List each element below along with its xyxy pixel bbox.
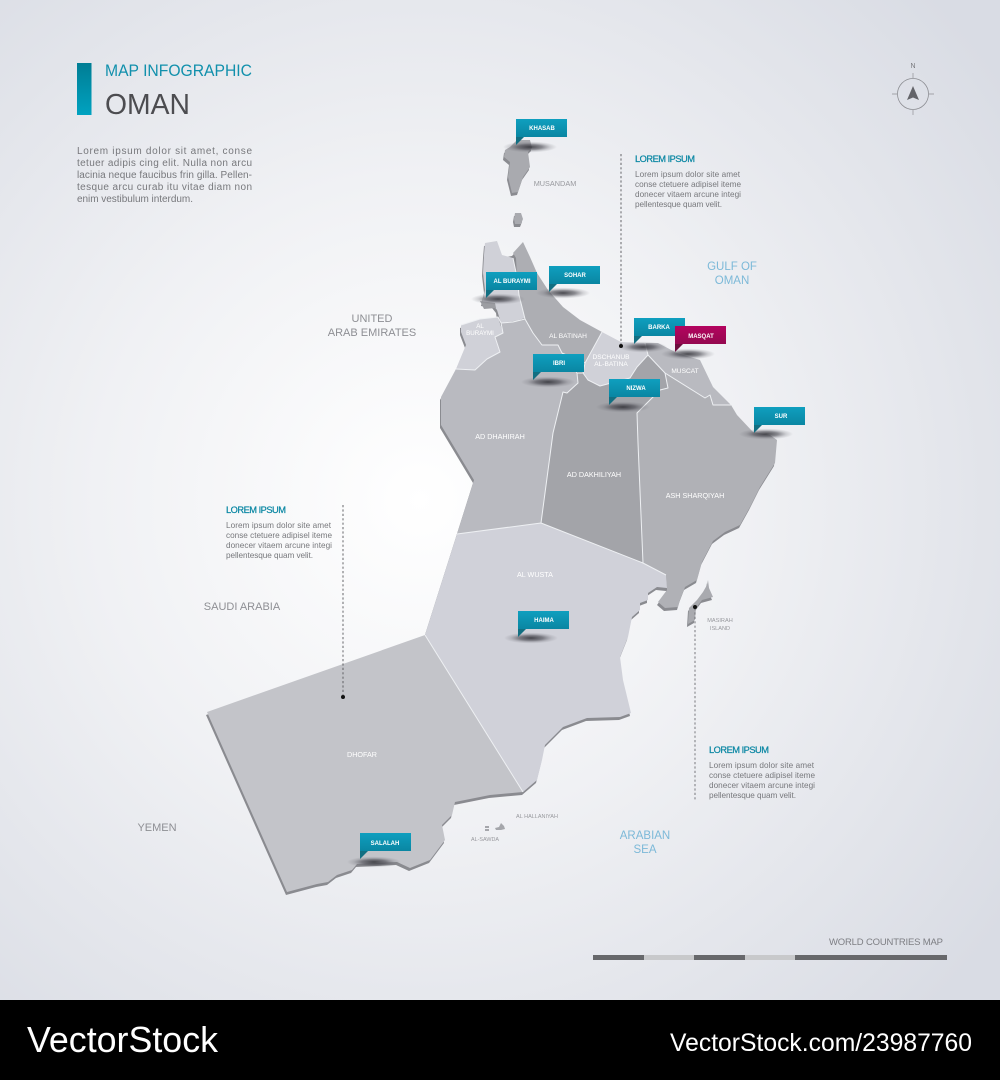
callout: bottom right: donecer vitaem arcune integi — [709, 781, 815, 790]
callout: bottom right: Lorem ipsum dolor site amet — [709, 761, 815, 770]
intro text block: tetuer adipis cing elit. Nulla non arcu — [77, 158, 252, 169]
region: Al Batinah — [513, 242, 602, 363]
region labels: DSCHANUB — [592, 354, 630, 361]
region: Al Buraymi north — [482, 241, 525, 323]
region: Al Hallaniyah islands — [485, 823, 505, 831]
flag: Haima — [504, 611, 569, 644]
callout: top right: donecer vitaem arcune integi — [635, 190, 741, 199]
title block: OMAN — [105, 89, 190, 121]
flag: Sur: SUR — [775, 414, 788, 420]
flag: Sohar — [536, 266, 600, 298]
map of Oman — [206, 140, 777, 895]
icon: compass — [892, 63, 934, 115]
country and sea labels: OMAN — [715, 275, 749, 287]
callout: left: conse ctetuere adipisel iteme — [226, 531, 332, 540]
flag: Ibri — [521, 354, 584, 388]
region labels: ASH SHARQIYAH — [666, 491, 724, 500]
enclave: UAE piece — [480, 301, 496, 309]
country and sea labels: GULF OF — [707, 261, 757, 273]
country and sea labels: ARAB EMIRATES — [328, 327, 416, 339]
region labels: BURAYMI — [466, 330, 494, 337]
intro text block — [77, 146, 252, 205]
callout: top right: Lorem ipsum dolor site amet — [635, 170, 741, 179]
intro text block: tesque arcu curab itu vitae diam non — [77, 182, 252, 193]
callout: left: pellentesque quam velit. — [226, 551, 313, 560]
accent bar — [77, 63, 92, 115]
icon: compass: N — [910, 63, 916, 70]
region: Ash Sharqiyah — [637, 373, 777, 608]
region: Dhofar — [207, 635, 523, 892]
watermark band: VectorStock — [27, 1019, 219, 1060]
flag: Al Buraymi — [471, 272, 537, 304]
region: Musandam — [504, 140, 532, 193]
flag: Nizwa: NIZWA — [626, 386, 646, 392]
region labels: MASIRAH — [707, 618, 733, 624]
country and sea labels: ARABIAN — [620, 830, 670, 842]
flag: Barka: BARKA — [648, 325, 670, 331]
flag: Sohar: SOHAR — [564, 273, 586, 279]
flag: Masqat: MASQAT — [688, 334, 714, 340]
flag: Ibri: IBRI — [553, 361, 565, 367]
region labels: MUSANDAM — [534, 179, 576, 188]
region labels: MUSCAT — [671, 368, 699, 375]
region labels: AL-BATINA — [594, 361, 628, 368]
region labels: AL HALLANIYAH — [516, 814, 558, 820]
title block: MAP INFOGRAPHIC — [105, 62, 252, 80]
region: Al Buraymi — [456, 317, 503, 370]
flag: Salalah: SALALAH — [371, 841, 399, 847]
scale bar — [593, 955, 947, 960]
flag: Salalah — [347, 833, 411, 868]
country and sea labels: SEA — [633, 844, 657, 856]
callout: bottom right: conse ctetuere adipisel iteme — [709, 771, 815, 780]
callout: top right: conse ctetuere adipisel iteme — [635, 180, 741, 189]
callout: top right: LOREM IPSUM — [635, 154, 695, 164]
region labels: AD DAKHILIYAH — [567, 470, 621, 479]
flag: Haima: HAIMA — [534, 618, 554, 624]
callout: top right — [619, 154, 741, 348]
callout: left: Lorem ipsum dolor site amet — [226, 521, 332, 530]
callout: bottom right: LOREM IPSUM — [709, 745, 769, 755]
flag: Sur — [739, 407, 805, 440]
callout: left: donecer vitaem arcune integi — [226, 541, 332, 550]
region labels: AL WUSTA — [517, 570, 553, 579]
region: Masirah Island — [688, 580, 713, 624]
intro text block: Lorem ipsum dolor sit amet, conse — [77, 146, 252, 157]
country and sea labels: UNITED — [352, 313, 393, 325]
intro text block: lacinia neque faucibus frin gilla. Pellen- — [77, 170, 252, 181]
region: Al Wusta — [425, 523, 667, 792]
caption: world countries map: WORLD COUNTRIES MAP — [829, 937, 943, 948]
region: Dschanub Al-Batina — [583, 332, 648, 386]
callout: left — [226, 505, 345, 699]
flag: Al Buraymi: AL BURAYMI — [493, 279, 531, 285]
region: Ad Dakhiliyah — [541, 355, 668, 563]
region labels: AL — [476, 323, 484, 330]
region labels: ISLAND — [710, 626, 730, 632]
region: Ad Dhahirah — [441, 319, 578, 534]
title block — [105, 62, 252, 121]
map extrusion — [206, 143, 776, 895]
country and sea labels: YEMEN — [137, 822, 177, 834]
country and sea labels: SAUDI ARABIA — [204, 601, 281, 613]
region labels: DHOFAR — [347, 750, 377, 759]
watermark band — [0, 1000, 1000, 1080]
region labels: AL BATINAH — [549, 333, 587, 340]
callout: left: LOREM IPSUM — [226, 505, 286, 515]
flag: Barka — [619, 318, 685, 352]
region borders — [425, 258, 731, 792]
region: Muscat — [645, 343, 731, 405]
callout: bottom right — [693, 605, 815, 800]
region labels: AL-SAWDA — [471, 837, 499, 843]
flag: Khasab — [503, 119, 567, 152]
region labels — [347, 179, 733, 843]
flag: Khasab: KHASAB — [529, 126, 555, 132]
callout: top right: pellentesque quam velit. — [635, 200, 722, 209]
watermark band: VectorStock.com/23987760 — [670, 1029, 972, 1057]
flag: Nizwa — [596, 379, 660, 412]
callout: bottom right: pellentesque quam velit. — [709, 791, 796, 800]
country and sea labels — [137, 261, 757, 856]
region labels: AD DHAHIRAH — [475, 432, 525, 441]
intro text block: enim vestibulum interdum. — [77, 194, 193, 205]
flag: Masqat — [661, 326, 726, 360]
